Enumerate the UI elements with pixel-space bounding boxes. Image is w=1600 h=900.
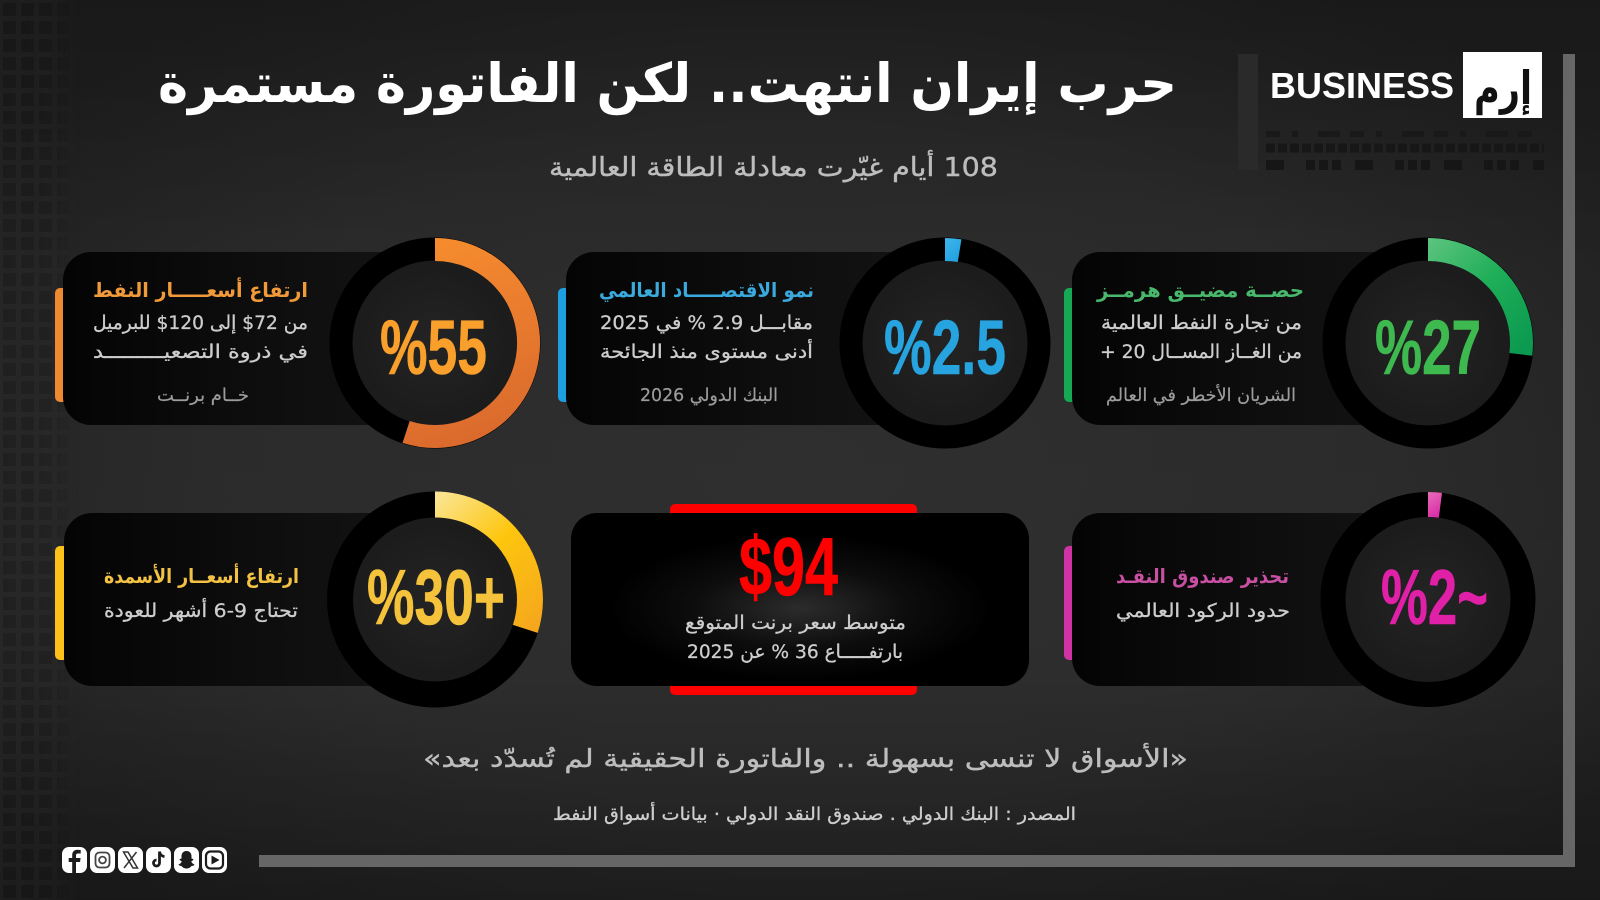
ring gauge 2.5% <box>851 249 1039 437</box>
title: حرب إيران انتهت.. لكن الفاتورة مستمرة <box>158 52 1177 115</box>
panel: fertilizer prices <box>55 504 530 694</box>
heading: ارتفاع أسعـــــار النفط <box>93 276 308 302</box>
description: من تجارة النفط العالمية <box>1101 312 1302 334</box>
heading: ارتفاع أسعــار الأسمدة <box>104 562 299 588</box>
description: أدنى مستوى منذ الجائحة <box>600 339 813 363</box>
value: %2.5 <box>884 305 1006 391</box>
description <box>685 612 906 663</box>
source line: المصدر : البنك الدولي . صندوق النقد الدولي · بيانات أسواق النفط <box>553 802 1076 825</box>
accent bar <box>1064 288 1080 402</box>
logo backdrop: dim bar and pixel blocks <box>1238 54 1544 170</box>
value: %30+ <box>367 553 505 641</box>
panel: oil prices <box>55 249 529 437</box>
frame: right vertical bar <box>1563 54 1575 867</box>
description: في ذروة التصعيـــــــــد <box>93 341 308 363</box>
accent bar <box>1064 546 1080 660</box>
value: %55 <box>380 305 487 391</box>
description: حدود الركود العالمي <box>1116 600 1290 622</box>
note: خــام برنــت <box>157 386 249 406</box>
logo: Eram Business: BUSINESS <box>1270 65 1454 106</box>
value: $94 <box>739 520 838 613</box>
icon: snapchat <box>174 847 199 873</box>
description: من الغــاز المســال 20 + <box>1100 341 1302 363</box>
description: بارتفـــــاع 36 % عن 2025 <box>687 641 903 663</box>
description: متوسط سعر برنت المتوقع <box>685 612 906 634</box>
panel: Brent forecast <box>571 504 1029 695</box>
heading: حصــة مضيــق هرمــز <box>1096 278 1304 302</box>
description <box>93 312 308 363</box>
logo: Eram Business: إرم <box>1474 61 1532 116</box>
bottom red bar <box>670 681 917 695</box>
icon: youtube <box>202 847 227 873</box>
ring gauge 55% <box>341 249 529 437</box>
icon: X <box>118 847 143 873</box>
social icons <box>62 847 227 873</box>
panel: IMF warning <box>1064 504 1523 694</box>
logo: Eram Business <box>1270 52 1542 118</box>
ring gauge 30% <box>340 504 530 694</box>
frame: bottom horizontal bar <box>259 855 1575 867</box>
note: الشريان الأخطر في العالم <box>1106 384 1296 406</box>
value: %27 <box>1375 305 1481 391</box>
heading: نمو الاقتصـــــاد العالمي <box>599 278 814 303</box>
quote: «الأسواق لا تنسى بسهولة .. والفاتورة الحقيقية لم تُسدّد بعد» <box>423 742 1188 774</box>
ring gauge 2% <box>1333 504 1523 694</box>
ring gauge 27% <box>1334 249 1522 437</box>
description: تحتاج 9-6 أشهر للعودة <box>104 598 298 622</box>
note: البنك الدولي 2026 <box>640 386 778 406</box>
panel: global growth <box>558 249 1039 437</box>
card background <box>64 513 435 686</box>
subtitle: 108 أيام غيّرت معادلة الطاقة العالمية <box>549 149 998 183</box>
accent bar <box>55 288 71 402</box>
description <box>600 312 813 363</box>
card background <box>1072 513 1428 686</box>
description: مقابـــل 2.9 % في 2025 <box>600 312 813 334</box>
icon: instagram <box>90 847 115 873</box>
heading: تحذير صندوق النقـد <box>1116 564 1289 588</box>
card background <box>571 513 1029 686</box>
icon: facebook <box>62 847 87 873</box>
icon: tiktok <box>146 847 171 873</box>
description <box>1100 312 1302 363</box>
card background <box>1072 252 1428 425</box>
card background <box>566 252 945 425</box>
card background <box>63 252 435 425</box>
top red bar <box>670 504 917 518</box>
accent bar <box>558 288 574 402</box>
value: %2~ <box>1381 553 1488 641</box>
panel: Hormuz share <box>1064 249 1522 437</box>
description: من ⁦$72⁩ إلى ⁦$120⁩ للبرميل <box>93 312 308 335</box>
accent bar <box>55 546 71 660</box>
